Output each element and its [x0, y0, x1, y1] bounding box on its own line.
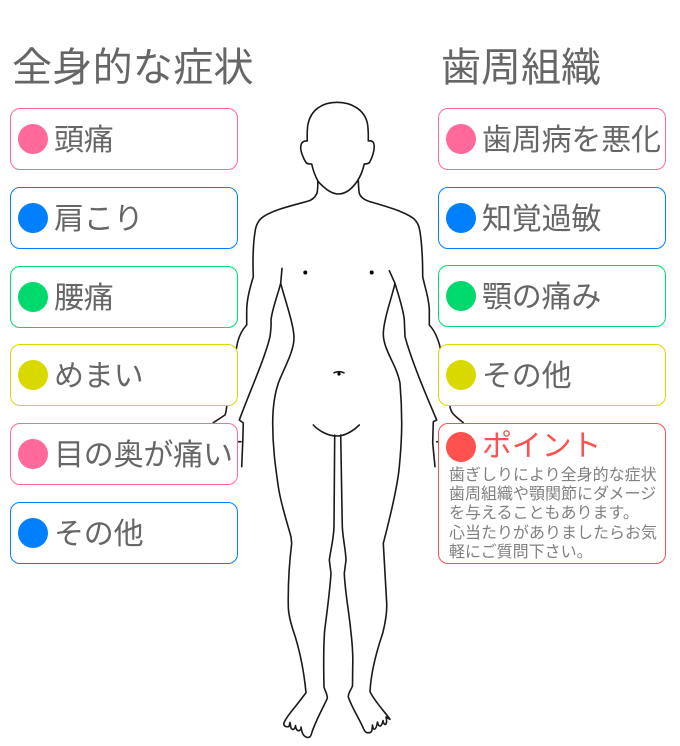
item: other, left: [10, 502, 238, 564]
item: eye pain: 目の奥が痛い: [54, 439, 233, 472]
item: headache: 頭痛: [54, 124, 114, 157]
item: dizziness: [10, 344, 238, 406]
item: eye pain: [10, 423, 238, 485]
panel: point callout: を与えることもあります。: [449, 505, 639, 522]
item: worsening periodontal disease: 歯周病を悪化: [482, 124, 661, 157]
panel: point callout: [438, 423, 666, 564]
panel: point callout: 歯周組織や顎関節にダメージ: [449, 486, 656, 503]
item: back pain: 腰痛: [54, 282, 114, 315]
panel: point callout: 軽にご質問下さい。: [449, 544, 593, 561]
panel: point callout: 心当たりがありましたらお気: [449, 525, 657, 542]
item: hypersensitivity: [438, 187, 666, 249]
item: worsening periodontal disease: [438, 108, 666, 170]
item: other, left: その他: [54, 518, 143, 551]
item: other, right: [438, 344, 666, 406]
item: stiff shoulders: [10, 187, 238, 249]
item: other, right: その他: [482, 360, 571, 393]
item: dizziness: めまい: [54, 360, 143, 393]
item: jaw pain: 顎の痛み: [482, 281, 601, 314]
item: jaw pain: [438, 265, 666, 327]
item: headache: [10, 108, 238, 170]
item: stiff shoulders: 肩こり: [54, 203, 143, 236]
panel: point callout: ポイント: [482, 430, 601, 463]
item: back pain: [10, 266, 238, 328]
heading: systemic symptoms: 全身的な症状: [12, 46, 254, 90]
panel: point callout: 歯ぎしりにより全身的な症状: [449, 467, 657, 484]
item: hypersensitivity: 知覚過敏: [482, 203, 601, 236]
heading: periodontal tissue: 歯周組織: [441, 46, 601, 90]
